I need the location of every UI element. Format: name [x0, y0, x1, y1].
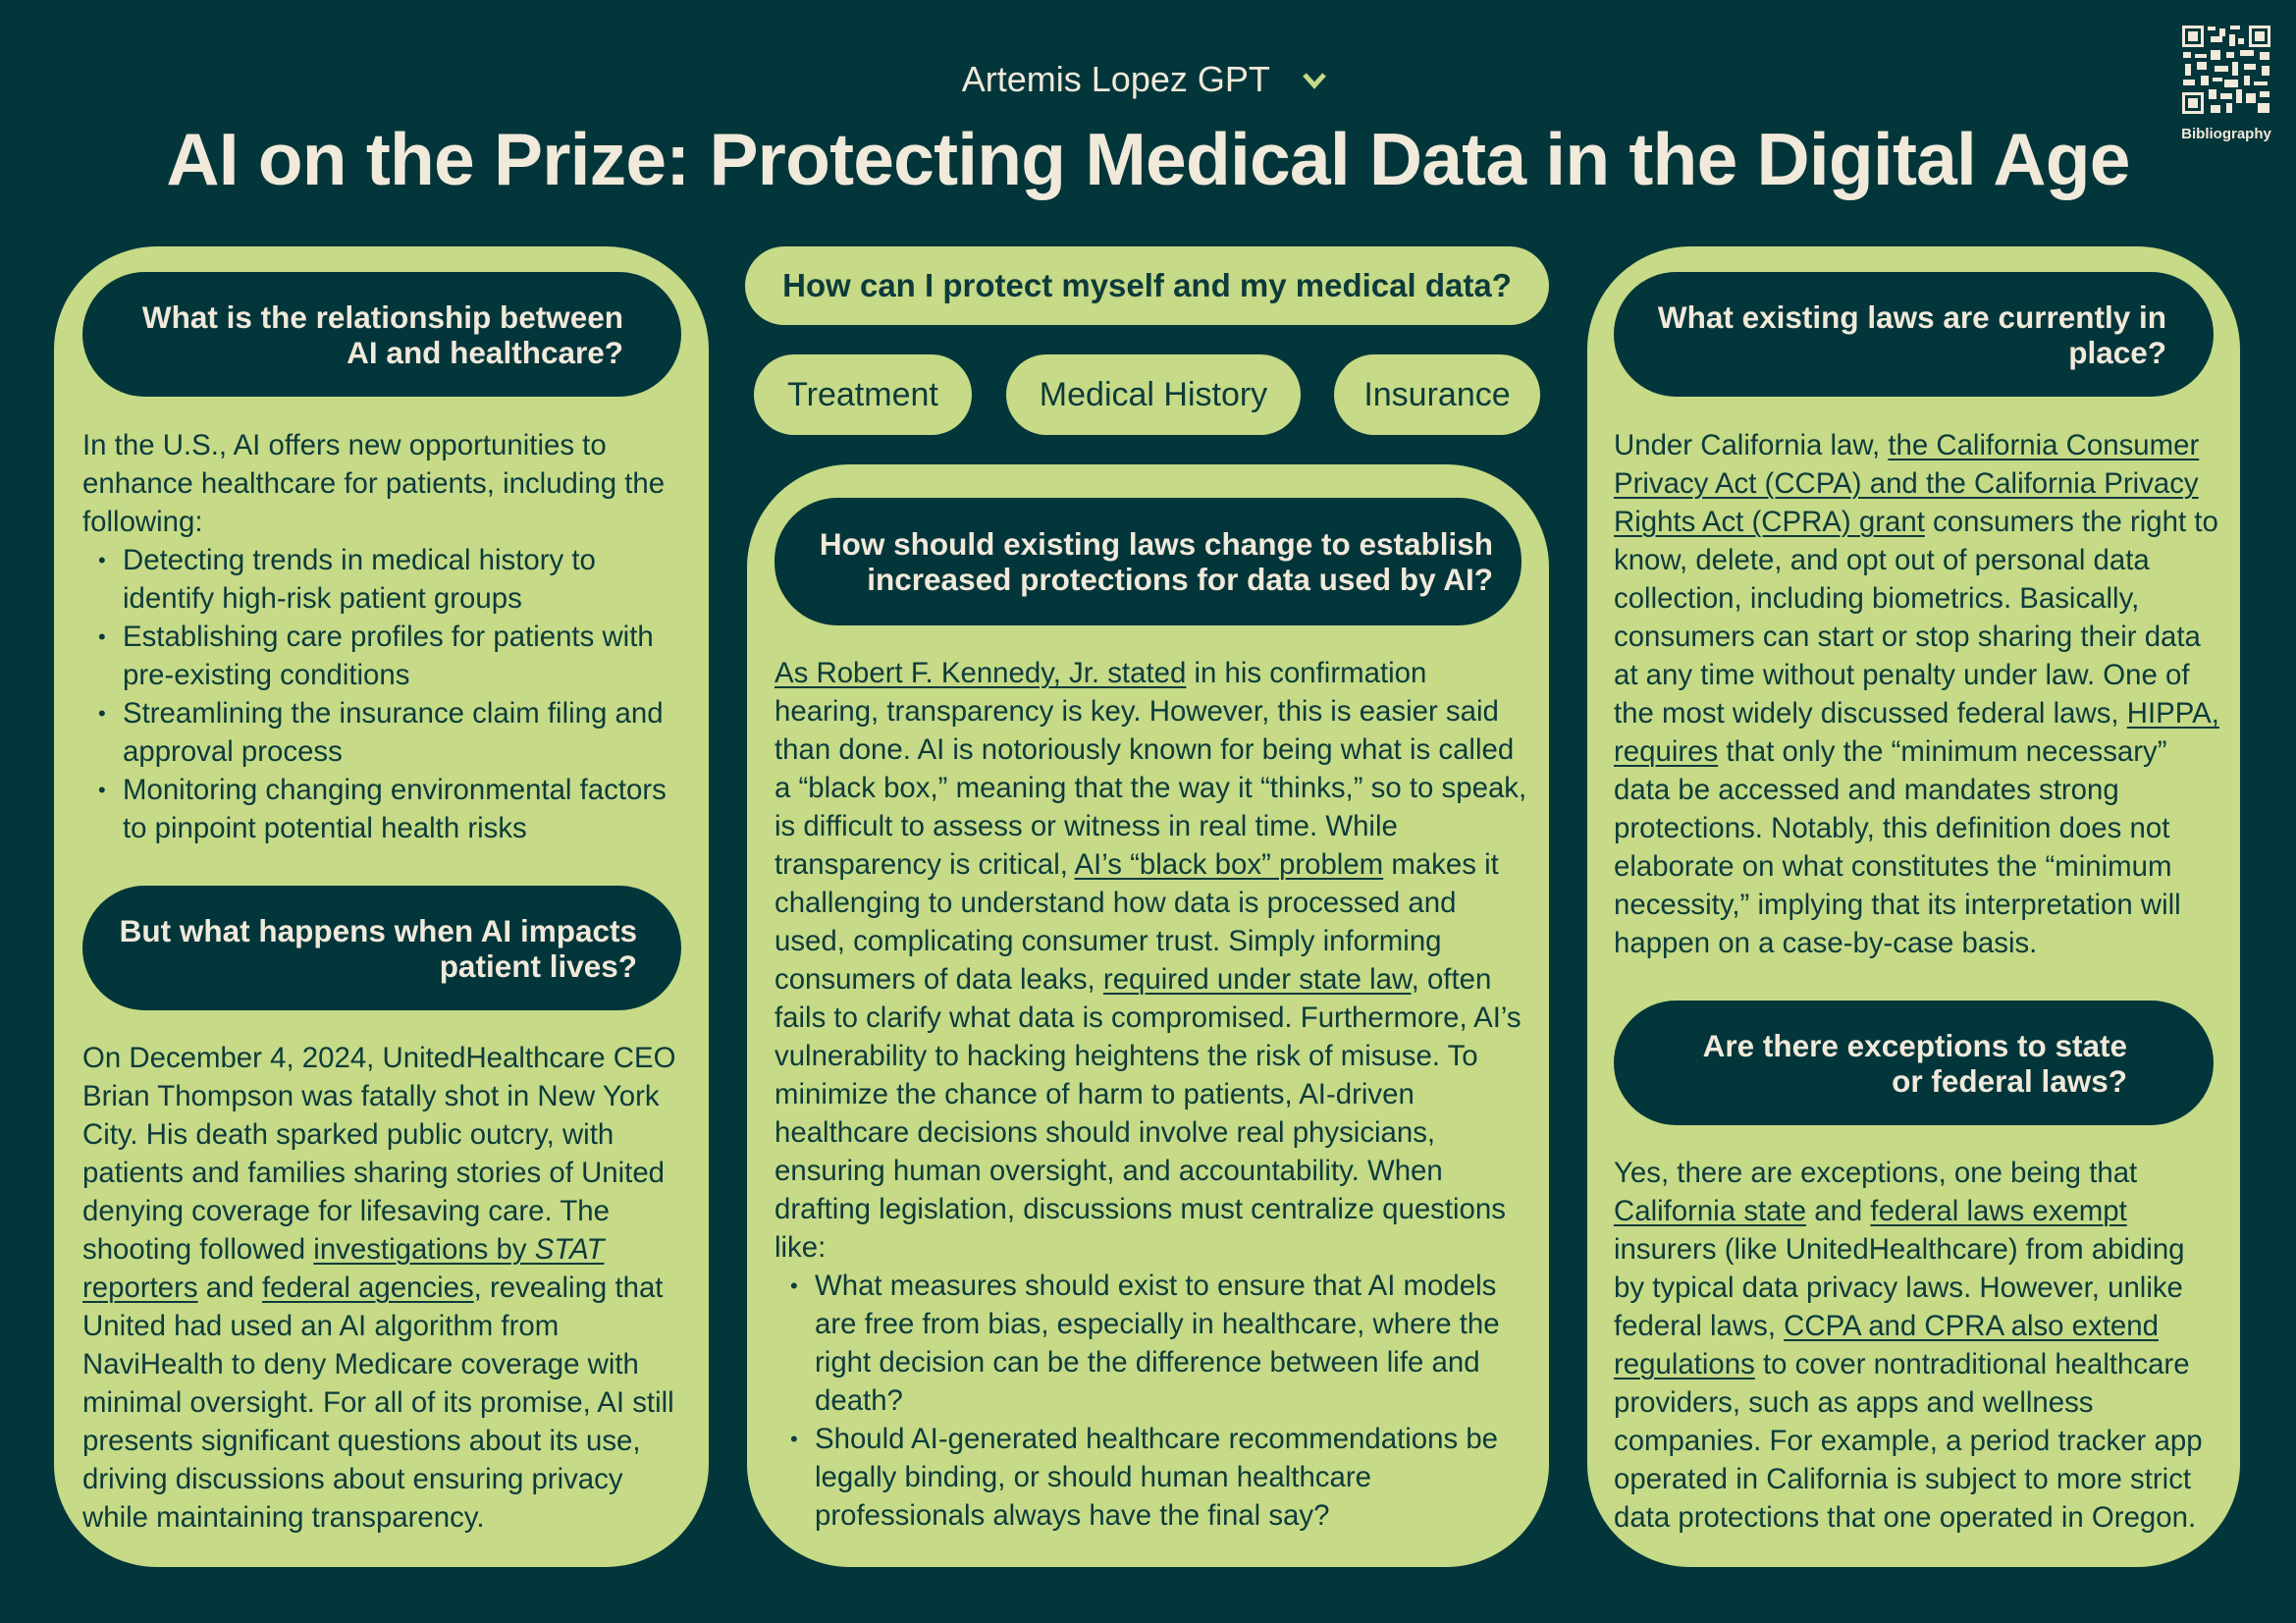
text block: CCPA CPRA HIPAA: Under California law, the California Consumer — [1614, 429, 2199, 461]
text block: transparency discussion — [774, 657, 1526, 1532]
text block: UnitedHealthcare story: while maintaining transparency. — [82, 1501, 485, 1534]
text block: transparency discussion: transparency is critical, AI’s “black box” problem makes it — [774, 848, 1499, 881]
text block: AI opportunities: following: — [82, 506, 203, 538]
heading: existing laws — [1614, 272, 2214, 397]
tag: Medical History — [1006, 354, 1301, 435]
text block: UnitedHealthcare story: shooting followed investigations by STAT — [82, 1233, 605, 1266]
text block: UnitedHealthcare story: United had used an AI algorithm from — [82, 1310, 559, 1342]
text block: CCPA CPRA HIPAA: collection, including biometrics. Basically, — [1614, 582, 2139, 615]
text block: UnitedHealthcare story: Brian Thompson was fatally shot in New York — [82, 1080, 660, 1112]
text block: exceptions detail: operated in California is subject to more strict — [1614, 1463, 2191, 1495]
text block: transparency discussion: a “black box,” meaning that the way it “thinks,” so to speak, — [774, 772, 1526, 804]
text block: CCPA CPRA HIPAA: requires that only the “minimum necessary” — [1614, 735, 2167, 768]
text block: transparency discussion: like: — [774, 1231, 826, 1264]
text block: CCPA CPRA HIPAA: Rights Act (CPRA) grant consumers the right to — [1614, 506, 2218, 538]
heading: relationship between AI and healthcare: AI and healthcare? — [347, 334, 623, 369]
text block: AI opportunities: In the U.S., AI offers new opportunities to — [82, 429, 607, 461]
text block: transparency discussion: are free from bias, especially in healthcare, where the — [815, 1308, 1500, 1340]
text block: UnitedHealthcare story: City. His death sparked public outcry, with — [82, 1118, 614, 1151]
title: AI on the Prize: Protecting Medical Data in the Digital Age — [166, 118, 2130, 200]
text block: CCPA CPRA HIPAA: elaborate on what constitutes the “minimum — [1614, 850, 2171, 883]
text block: AI opportunities: pre-existing conditions — [123, 659, 409, 691]
heading: exceptions: or federal laws? — [1892, 1062, 2127, 1098]
text block: transparency discussion: Should AI-generated healthcare recommendations be — [815, 1423, 1498, 1455]
text block: exceptions detail: California state and federal laws exempt — [1614, 1195, 2127, 1227]
text block: UnitedHealthcare story: minimal oversight. For all of its promise, AI still — [82, 1386, 674, 1419]
text block: AI opportunities: approval process — [123, 735, 343, 768]
text block: transparency discussion: vulnerability to hacking heightens the risk of misuse. To — [774, 1040, 1478, 1072]
icon: QR code bibliography: Bibliography — [2181, 126, 2271, 142]
text block: CCPA CPRA HIPAA: the most widely discussed federal laws, HIPPA, — [1614, 697, 2219, 730]
heading: relationship between AI and healthcare: What is the relationship between — [142, 298, 623, 334]
text block: UnitedHealthcare story: patients and families sharing stories of United — [82, 1157, 665, 1189]
text block: exceptions detail: regulations to cover nontraditional healthcare — [1614, 1348, 2190, 1380]
text block: exceptions detail: by typical data privacy laws. However, unlike — [1614, 1271, 2183, 1304]
text block: AI opportunities: to pinpoint potential health risks — [123, 812, 527, 844]
text block: transparency discussion: minimize the chance of harm to patients, AI-driven — [774, 1078, 1415, 1110]
tag: Insurance: Insurance — [1363, 375, 1511, 412]
tag: Medical History: Medical History — [1040, 375, 1267, 412]
heading: existing laws: What existing laws are currently in — [1658, 298, 2166, 334]
panel: middle column — [747, 464, 1549, 1567]
text block: transparency discussion: challenging to understand how data is processed and — [774, 887, 1456, 919]
heading: AI impacts patient lives — [82, 886, 681, 1010]
text block: CCPA CPRA HIPAA: necessity,” implying that its interpretation will — [1614, 889, 2181, 921]
text block: exceptions detail: data protections that one operated in Oregon. — [1614, 1501, 2196, 1534]
heading: how should laws change: increased protections for data used by AI? — [867, 562, 1493, 597]
heading: how should laws change: How should existing laws change to establish — [820, 526, 1493, 562]
text block: transparency discussion: What measures should exist to ensure that AI models — [815, 1270, 1496, 1302]
text block: exceptions detail: Yes, there are exceptions, one being that — [1614, 1157, 2137, 1189]
text block: UnitedHealthcare story: driving discussions about ensuring privacy — [82, 1463, 623, 1495]
text block: transparency discussion: is difficult to assess or witness in real time. While — [774, 810, 1398, 842]
heading: how can I protect myself: How can I protect myself and my medical data? — [782, 267, 1512, 303]
text block: CCPA CPRA HIPAA — [1614, 429, 2219, 959]
text block: AI opportunities: Establishing care profiles for patients with — [123, 621, 654, 653]
heading: AI impacts patient lives: But what happens when AI impacts — [120, 913, 637, 948]
text block: exceptions detail: insurers (like UnitedHealthcare) from abiding — [1614, 1233, 2185, 1266]
text block: transparency discussion: ensuring human oversight, and accountability. When — [774, 1155, 1443, 1187]
heading: existing laws: place? — [2068, 334, 2166, 369]
panel: left column — [54, 246, 709, 1567]
text block: CCPA CPRA HIPAA: protections. Notably, this definition does not — [1614, 812, 2169, 844]
text block: transparency discussion: death? — [815, 1384, 903, 1417]
text block: UnitedHealthcare story: denying coverage for lifesaving care. The — [82, 1195, 610, 1227]
text block: exceptions detail — [1614, 1157, 2203, 1534]
tag: Treatment: Treatment — [787, 375, 938, 412]
panel: right column — [1587, 246, 2240, 1567]
text block: CCPA CPRA HIPAA: happen on a case-by-case basis. — [1614, 927, 2037, 959]
tag: Treatment — [754, 354, 972, 435]
text block: transparency discussion: used, complicating consumer trust. Simply informing — [774, 925, 1442, 957]
text block: transparency discussion: than done. AI is notoriously known for being what is called — [774, 733, 1514, 766]
text block: UnitedHealthcare story: On December 4, 2024, UnitedHealthcare CEO — [82, 1042, 675, 1074]
heading: exceptions — [1614, 1001, 2214, 1125]
text block: transparency discussion: professionals always have the final say? — [815, 1499, 1329, 1532]
text block: UnitedHealthcare story: NaviHealth to deny Medicare coverage with — [82, 1348, 639, 1380]
text block: AI opportunities: enhance healthcare for patients, including the — [82, 467, 665, 500]
text block: UnitedHealthcare story: reporters and federal agencies, revealing that — [82, 1271, 663, 1304]
text block: transparency discussion: As Robert F. Kennedy, Jr. stated in his confirmation — [774, 657, 1426, 689]
subtitle: Artemis Lopez GPT — [962, 59, 1269, 99]
text block: transparency discussion: drafting legislation, discussions must centralize questions — [774, 1193, 1506, 1225]
text block: exceptions detail: providers, such as apps and wellness — [1614, 1386, 2093, 1419]
text block: transparency discussion: fails to clarify what data is compromised. Furthermore, AI’s — [774, 1001, 1522, 1034]
text block: AI opportunities: Streamlining the insurance claim filing and — [123, 697, 664, 730]
text block: exceptions detail: companies. For example, a period tracker app — [1614, 1425, 2203, 1457]
tag: Insurance — [1334, 354, 1540, 435]
icon: QR code bibliography — [2181, 26, 2271, 142]
text block: CCPA CPRA HIPAA: Privacy Act (CCPA) and the California Privacy — [1614, 467, 2199, 500]
text block: transparency discussion: hearing, transparency is key. However, this is easier said — [774, 695, 1499, 728]
text block: UnitedHealthcare story — [82, 1042, 675, 1534]
text block: CCPA CPRA HIPAA: data be accessed and mandates strong — [1614, 774, 2119, 806]
text block: AI opportunities: Detecting trends in medical history to — [123, 544, 596, 576]
text block: transparency discussion: right decision can be the difference between life and — [815, 1346, 1480, 1379]
text block: AI opportunities: Monitoring changing environmental factors — [123, 774, 667, 806]
text block: CCPA CPRA HIPAA: know, delete, and opt out of personal data — [1614, 544, 2150, 576]
text block: transparency discussion: legally binding, or should human healthcare — [815, 1461, 1371, 1493]
text block: UnitedHealthcare story: presents significant questions about its use, — [82, 1425, 641, 1457]
text block: transparency discussion: consumers of data leaks, required under state law, often — [774, 963, 1491, 996]
text block: AI opportunities: identify high-risk patient groups — [123, 582, 522, 615]
text block: exceptions detail: federal laws, CCPA and CPRA also extend — [1614, 1310, 2159, 1342]
text block: CCPA CPRA HIPAA: consumers can start or stop sharing their data — [1614, 621, 2201, 653]
heading: relationship between AI and healthcare — [82, 272, 681, 397]
text block: CCPA CPRA HIPAA: at any time without penalty under law. One of — [1614, 659, 2190, 691]
heading: how can I protect myself — [745, 246, 1549, 325]
heading: exceptions: Are there exceptions to state — [1703, 1027, 2127, 1062]
heading: how should laws change — [774, 498, 1522, 625]
heading: AI impacts patient lives: patient lives? — [440, 948, 637, 984]
text block: AI opportunities — [82, 429, 667, 844]
text block: transparency discussion: healthcare decisions should involve real physicians, — [774, 1116, 1435, 1149]
